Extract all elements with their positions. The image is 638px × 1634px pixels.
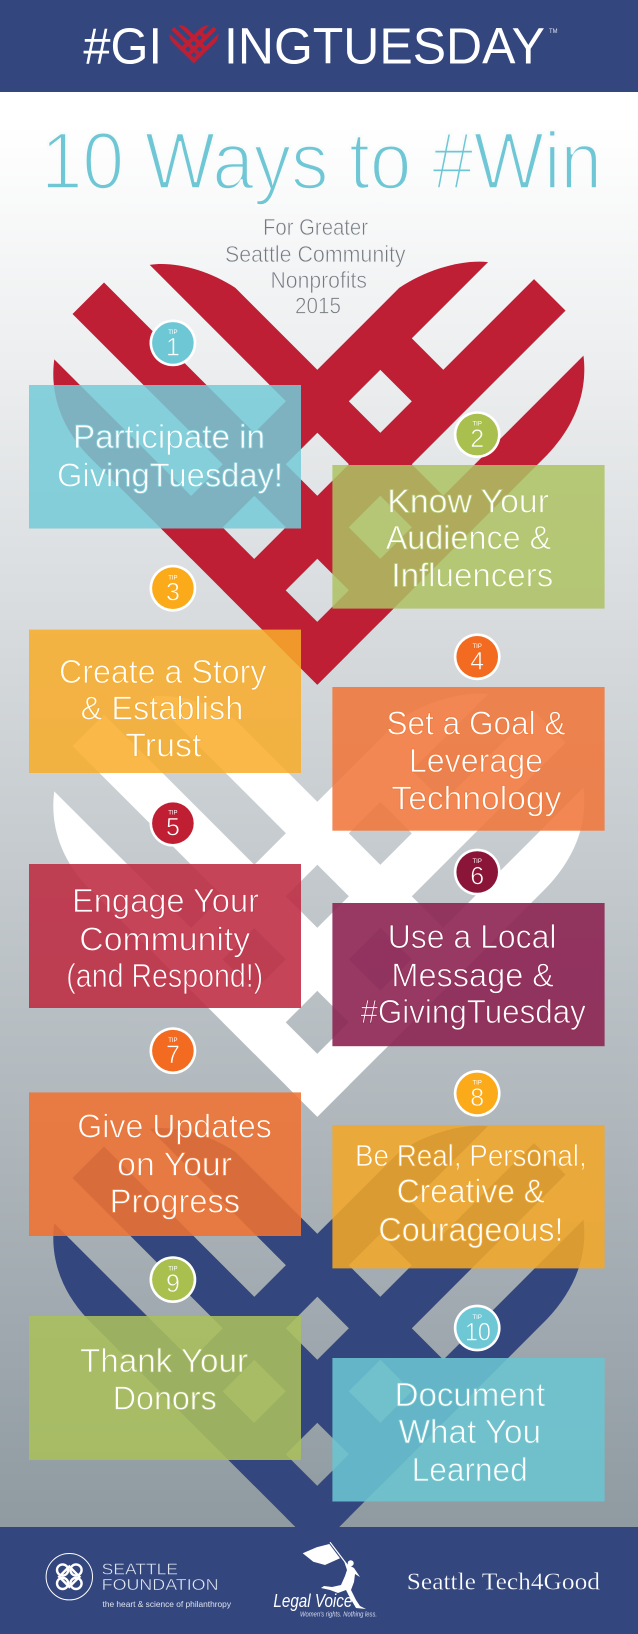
tip 6 panel: Use a Local (388, 918, 556, 955)
subtitle: Seattle Community (225, 241, 406, 267)
tip 8 panel: Be Real, Personal, (355, 1138, 587, 1173)
tip 1 badge: TIP (168, 330, 178, 336)
tip 4 panel: Leverage (409, 742, 543, 779)
tip 6 panel: Message & (391, 956, 554, 993)
logo: Seattle Foundation: the heart & science of philanthropy (102, 1599, 232, 1609)
tip 3 panel: Trust (125, 726, 201, 763)
tip 6 badge: TIP (473, 859, 482, 865)
subtitle: For Greater (263, 214, 368, 240)
tip 4 panel (332, 687, 605, 831)
tip 6 panel (332, 903, 605, 1046)
tip 2 badge (454, 411, 501, 458)
tip 3 panel: & Establish (81, 690, 243, 727)
tip 9 badge: 9 (166, 1270, 180, 1298)
icon: small woven heart (169, 25, 218, 63)
tip 1 badge: 1 (166, 333, 180, 361)
tip 10 panel: Document (395, 1376, 545, 1413)
icon: running figure with flag (303, 1542, 366, 1609)
tip 7 panel: Progress (110, 1182, 240, 1220)
tip 5 panel: (and Respond!) (66, 957, 263, 994)
tip 3 badge: TIP (168, 575, 178, 581)
tip 3 badge: 3 (166, 579, 180, 607)
tip 10 panel (332, 1358, 605, 1502)
tip 10 badge: TIP (473, 1315, 482, 1321)
tip 9 panel: Donors (113, 1380, 217, 1417)
logo: Legal Voice: Legal Voice (273, 1591, 352, 1611)
tip 6 badge: 6 (470, 862, 484, 890)
tip 2 badge: TIP (473, 422, 482, 428)
tip 1 badge (150, 320, 196, 366)
tip 5 badge: TIP (168, 810, 178, 816)
logo: Legal Voice (273, 1542, 377, 1618)
tip 2 panel: Influencers (391, 556, 553, 593)
tip 8 badge: TIP (473, 1080, 482, 1086)
tip 10 panel: What You (399, 1413, 541, 1450)
subtitle: 2015 (295, 293, 341, 319)
footer band (0, 1527, 638, 1634)
tip 8 badge (454, 1070, 501, 1117)
heart: white (53, 694, 584, 1117)
tip 5 panel: Community (79, 921, 251, 958)
tip 8 panel: Creative & (397, 1173, 545, 1210)
subtitle (225, 214, 406, 319)
heart: blue (53, 1126, 584, 1549)
tip 9 panel: Thank Your (80, 1342, 248, 1379)
logo: Seattle Foundation: FOUNDATION (102, 1577, 218, 1594)
tip 4 badge (454, 633, 501, 680)
tip 4 badge: 4 (470, 647, 484, 675)
header band (0, 0, 638, 92)
tip 3 panel: Create a Story (59, 653, 267, 690)
tip 2 panel (332, 465, 605, 609)
tip 7 badge: TIP (168, 1038, 178, 1044)
tip 2 panel: Audience & (386, 519, 551, 556)
trademark: TM (549, 28, 558, 35)
tip 8 panel: Courageous! (378, 1211, 564, 1248)
tip 8 panel (332, 1125, 605, 1268)
tip 5 panel (29, 864, 301, 1008)
logo: Seattle Tech4Good: Seattle Tech4Good (407, 1570, 600, 1596)
tip 2 badge: 2 (470, 425, 484, 453)
tip 7 panel: on Your (117, 1145, 232, 1182)
subtitle: Nonprofits (270, 267, 367, 293)
tip 9 panel (29, 1316, 301, 1460)
tip 10 badge (454, 1305, 501, 1351)
logo: Seattle Foundation: SEATTLE (102, 1562, 178, 1579)
icon: knot in circle (46, 1554, 92, 1600)
tip 7 badge: 7 (166, 1041, 180, 1069)
logo: Legal Voice: Women's rights. Nothing less. (300, 1611, 377, 1618)
tip 10 badge: 10 (465, 1318, 491, 1346)
heart: red (53, 262, 584, 685)
tip 5 badge (150, 800, 196, 847)
tip 3 badge (150, 565, 196, 612)
tip 6 panel: #GivingTuesday (360, 993, 586, 1030)
tip 1 panel: GivingTuesday! (57, 456, 283, 493)
tip 8 badge: 8 (470, 1084, 484, 1112)
title: 10 Ways to #Win (41, 116, 602, 206)
tip 9 badge (150, 1256, 196, 1303)
tip 3 panel (29, 630, 301, 773)
tip 1 panel (29, 385, 301, 528)
tip 5 panel: Engage Your (72, 882, 259, 919)
logo text: #GI: #GI (83, 18, 162, 75)
tip 9 badge: TIP (168, 1267, 178, 1273)
tip 7 panel: Give Updates (77, 1108, 272, 1145)
tip 4 badge: TIP (473, 644, 482, 650)
tip 2 panel: Know Your (387, 482, 549, 520)
tip 4 panel: Technology (391, 780, 562, 817)
logo: Seattle Foundation (46, 1554, 232, 1609)
tip 1 panel: Participate in (73, 418, 265, 455)
tip 7 panel (29, 1092, 301, 1236)
tip 4 panel: Set a Goal & (386, 705, 566, 742)
tip 10 panel: Learned (412, 1451, 528, 1488)
logo text: INGTUESDAY: INGTUESDAY (224, 18, 545, 75)
tip 7 badge (150, 1027, 196, 1074)
tip 5 badge: 5 (166, 814, 180, 842)
tip 6 badge (454, 849, 501, 895)
